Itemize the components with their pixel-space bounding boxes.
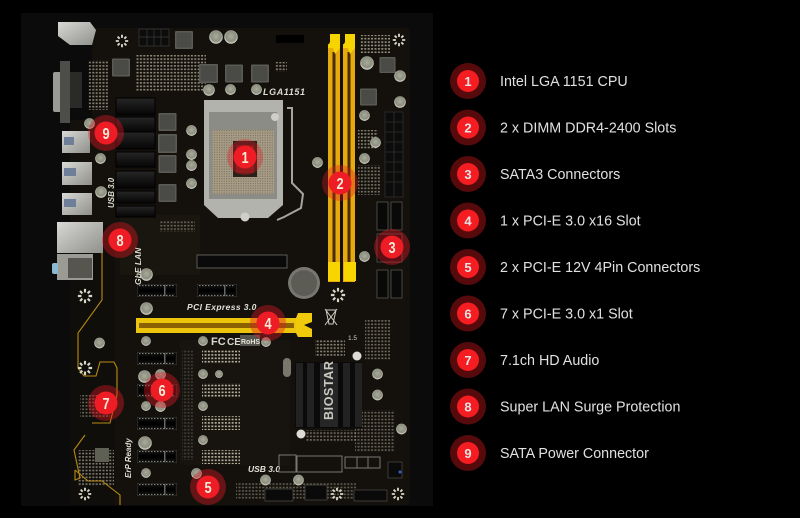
legend item 4: 4 — [464, 214, 472, 228]
VRM heatsink — [116, 98, 155, 217]
PCI Express label: PCI Express 3.0 — [187, 302, 257, 312]
legend item 7: 7.1ch HD Audio — [500, 353, 599, 369]
legend item 8: Super LAN Surge Protection — [500, 400, 680, 416]
badge 5 — [190, 469, 226, 505]
24-pin ATX connector — [385, 112, 403, 197]
panel: photo background — [21, 13, 433, 506]
badge 2: 2 — [336, 176, 344, 193]
badge 1: 1 — [241, 150, 249, 167]
LGA1151 label: LGA1151 — [263, 87, 306, 97]
coin battery — [288, 267, 320, 299]
badge 7 — [88, 385, 124, 421]
motherboard — [52, 22, 410, 505]
certification marks: RoHS — [241, 339, 260, 346]
badge 4: 4 — [264, 316, 272, 333]
badge 8 — [102, 222, 138, 258]
badge 7: 7 — [102, 396, 110, 413]
front panel boxes — [279, 455, 380, 472]
CPU socket — [204, 100, 303, 222]
badge 9 — [88, 115, 124, 151]
badge 3 — [374, 229, 410, 265]
legend item 5 — [450, 249, 700, 285]
legend item 8 — [450, 388, 680, 424]
crystal oscillator — [283, 358, 291, 377]
SATA connectors — [377, 202, 402, 298]
version label: 1.5 — [348, 335, 357, 342]
legend item 2: 2 — [464, 120, 472, 136]
capacitors — [84, 30, 407, 485]
USB 3.0 label: USB 3.0 — [248, 464, 280, 474]
legend item 7 — [450, 342, 599, 378]
rear IO: audio jacks — [52, 254, 93, 280]
GbE LAN label: GbE LAN — [133, 247, 143, 285]
legend item 1: 1 — [464, 74, 472, 89]
certification marks: FC — [211, 336, 226, 348]
legend list — [450, 63, 700, 471]
photo badges — [88, 115, 410, 505]
badge 6 — [144, 372, 180, 408]
legend item 8: 8 — [464, 400, 472, 414]
rear IO: top connector — [58, 22, 96, 45]
legend item 5: 5 — [464, 260, 472, 275]
legend item 4 — [450, 202, 641, 238]
chipset heatsink — [295, 352, 362, 438]
legend item 5: 2 x PCI-E 12V 4Pin Connectors — [500, 260, 700, 276]
legend item 9: SATA Power Connector — [500, 446, 649, 462]
certification marks: CE — [227, 337, 241, 348]
badge 6: 6 — [158, 383, 166, 400]
legend item 3: 3 — [464, 167, 472, 182]
USB 3.0 rotated label: USB 3.0 — [107, 177, 116, 208]
legend item 3 — [450, 156, 620, 192]
PCIe x1 slots — [137, 284, 237, 496]
badge 3: 3 — [388, 240, 396, 257]
DIMM slots — [328, 34, 356, 282]
chipset heatsink: BIOSTAR — [322, 360, 336, 420]
legend item 4: 1 x PCI-E 3.0 x16 Slot — [500, 214, 641, 230]
chip near audio — [95, 448, 109, 462]
chokes — [112, 31, 396, 202]
certification marks — [211, 309, 337, 348]
legend item 9: 9 — [464, 446, 472, 461]
CPU power connector — [139, 29, 169, 46]
badge 9: 9 — [102, 126, 110, 143]
bottom headers — [265, 462, 402, 501]
legend item 9 — [450, 435, 649, 471]
PCIe top long slot — [197, 255, 287, 268]
legend item 3: SATA3 Connectors — [500, 167, 620, 183]
badge 5: 5 — [204, 480, 212, 497]
blue LED — [398, 470, 402, 474]
legend item 6 — [450, 296, 633, 332]
badge 1 — [227, 139, 263, 175]
legend item 2 — [450, 110, 676, 146]
legend item 1 — [450, 63, 628, 99]
rear IO: LAN port — [57, 222, 103, 253]
legend item 7: 7 — [464, 353, 472, 368]
star mounting holes — [78, 34, 405, 500]
PCIe x16 slot — [136, 313, 312, 337]
badge 8: 8 — [116, 233, 124, 250]
rear IO: USB ports — [62, 131, 92, 215]
legend item 6: 7 x PCI-E 3.0 x1 Slot — [500, 306, 633, 322]
legend item 6: 6 — [464, 306, 472, 322]
ErP Ready label: ErP Ready — [124, 438, 133, 478]
legend item 2: 2 x DIMM DDR4-2400 Slots — [500, 120, 676, 136]
badge 2 — [322, 165, 358, 201]
solder component clusters — [78, 35, 395, 500]
badge 4 — [250, 305, 286, 341]
legend item 1: Intel LGA 1151 CPU — [500, 74, 628, 90]
rear IO: VGA connector — [53, 61, 82, 123]
board PCB — [70, 28, 410, 505]
gold traces — [74, 250, 120, 505]
